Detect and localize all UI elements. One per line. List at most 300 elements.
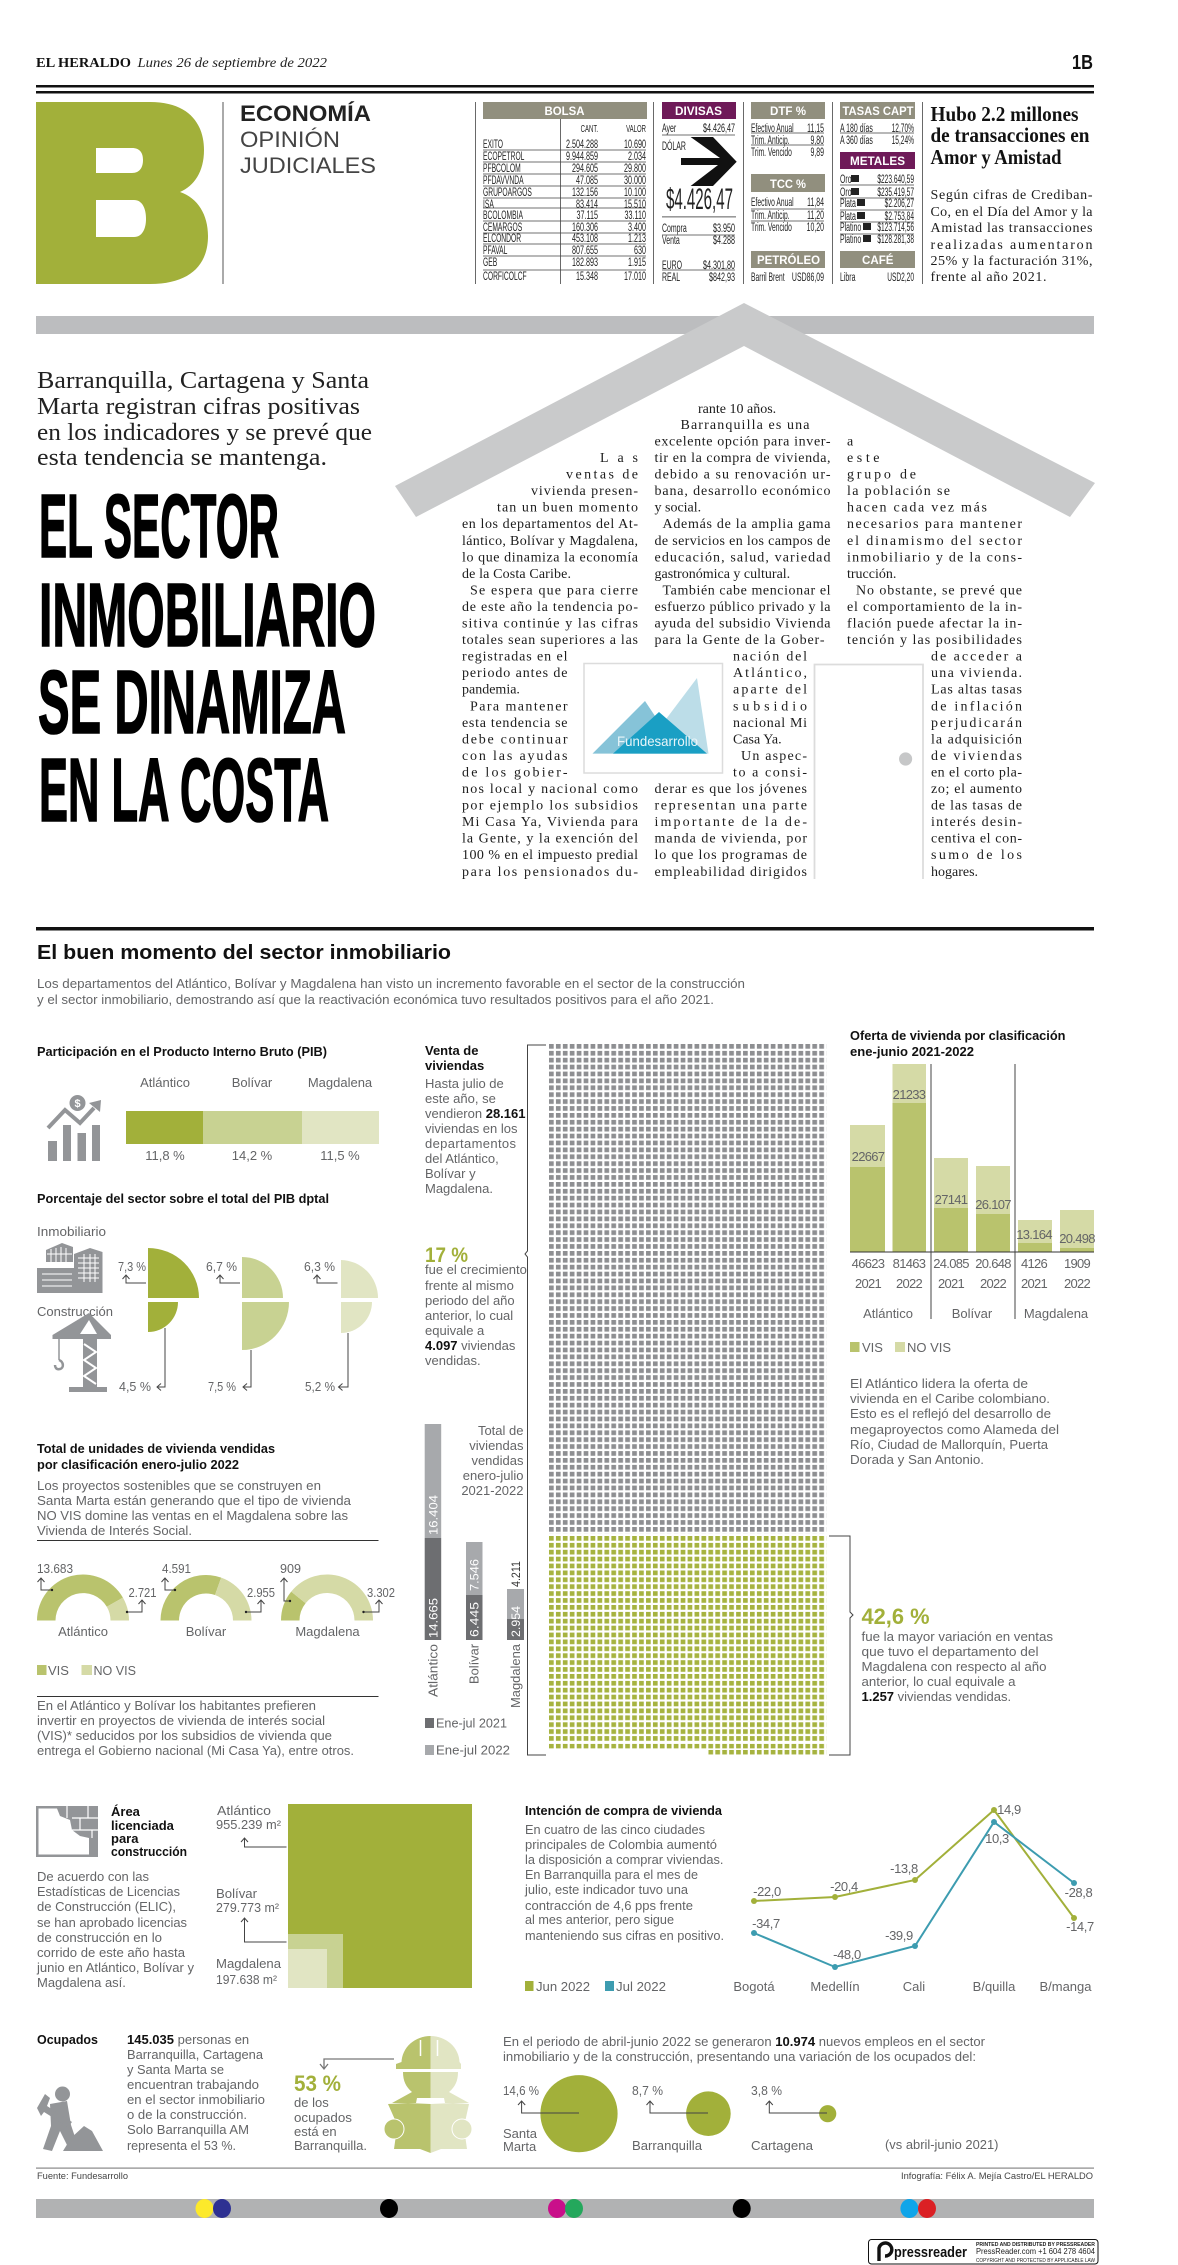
main title xyxy=(38,477,376,841)
panel: ocupados: de los xyxy=(294,2095,329,2110)
panel: total de unidades vendidas: 3.302 xyxy=(367,1585,395,1600)
article column 1: totales sean superiores a las xyxy=(462,633,638,648)
panel: area licenciada: para xyxy=(111,1831,139,1846)
line chart: -20,4 xyxy=(830,1879,858,1894)
table: divisas: $4.426,47 xyxy=(703,122,735,136)
masthead: newspaper and date: 1B xyxy=(1072,52,1093,74)
table: divisas: $4.426,47 xyxy=(666,183,733,216)
callout: 17 %: fue el crecimiento xyxy=(425,1262,527,1277)
pressreader stamp: COPYRIGHT AND PROTECTED BY APPLICABLE LAW xyxy=(976,2258,1095,2264)
table: bolsa: 29.800 xyxy=(624,162,646,176)
panel: total de unidades vendidas: 909 xyxy=(280,1561,301,1576)
article column 2: lo que los programas de xyxy=(654,848,807,863)
table: bolsa: 17.010 xyxy=(624,270,646,284)
icon: tower crane xyxy=(52,1313,111,1392)
section names: ECONOMÍA xyxy=(240,101,371,126)
article column 1: Mi Casa Ya, Vivienda para xyxy=(462,815,639,830)
printer colour bar xyxy=(36,2199,1094,2218)
panel: intencion de compra: En Barranquilla para el mes de xyxy=(525,1867,698,1882)
table: tasas, metales, cafe: METALES xyxy=(850,154,905,168)
panel: total de unidades vendidas: Los proyectos sostenibles que se construyen en xyxy=(37,1478,321,1493)
article column 2: representan una parte xyxy=(654,799,807,814)
panel: area licenciada: de Construcción (ELIC), xyxy=(37,1899,176,1914)
panel: oferta de vivienda: 20.648 xyxy=(975,1256,1011,1271)
panel: intencion de compra: En cuatro de las cinco ciudades xyxy=(525,1822,705,1837)
table: dtf, tcc, petroleo: Barril Brent xyxy=(751,271,785,285)
note: Dorada y San Antonio. xyxy=(850,1452,984,1467)
panel: porcentaje del sector: Inmobiliario xyxy=(37,1224,106,1239)
article column 2: to a consi- xyxy=(733,766,807,780)
panel: ocupados xyxy=(37,2032,472,2153)
panel: nuevos empleos: Santa xyxy=(503,2126,538,2141)
panel: total de unidades vendidas: (VIS)* seducidos por los subsidios de vivienda que xyxy=(37,1728,332,1743)
bracket left of unit grid xyxy=(525,1045,546,1755)
article column 2: Casa Ya. xyxy=(733,732,782,747)
panel: total viviendas vendidas bars xyxy=(425,1423,524,1758)
panel: total de unidades vendidas: Santa Marta están generando que el tipo de vivienda xyxy=(37,1493,352,1508)
table: dtf, tcc, petroleo: 9,89 xyxy=(810,146,824,160)
table: dtf, tcc, petroleo: Efectivo Anual xyxy=(751,122,794,136)
table: bolsa: CEMARGOS xyxy=(483,221,523,235)
panel: oferta de vivienda: 2021 xyxy=(1021,1276,1048,1291)
panel: total de unidades vendidas: 2.955 xyxy=(247,1585,275,1600)
panel: oferta de vivienda: 20.498 xyxy=(1059,1231,1095,1246)
house roof shape xyxy=(395,303,1095,517)
callout: 17 %: vendidas. xyxy=(425,1353,481,1368)
panel: participacion en PIB: Magdalena xyxy=(308,1075,373,1090)
half donut: Bolivar xyxy=(160,1575,252,1620)
bar: Atlantico: Atlántico xyxy=(426,1644,440,1697)
table: divisas xyxy=(662,102,737,285)
panel: participacion en PIB: Bolívar xyxy=(232,1075,273,1090)
article column 1: con las ayudas xyxy=(462,749,568,764)
article column 1: lo que dinamiza la economía xyxy=(462,550,639,565)
bar: Magdalena: Magdalena xyxy=(508,1643,523,1708)
article column 2: esfuerzo público privado y la xyxy=(654,600,831,615)
panel: porcentaje del sector xyxy=(37,1191,378,1394)
main title: EL SECTOR xyxy=(39,477,279,577)
table: dtf, tcc, petroleo: 11,20 xyxy=(807,209,824,223)
icon: buildings xyxy=(37,1243,102,1293)
panel: area licenciada: Atlántico xyxy=(217,1803,271,1818)
article column 1: sitiva continúe y las cifras xyxy=(462,616,638,632)
article column 3: perjudicarán xyxy=(931,716,1022,731)
panel: oferta de vivienda: Atlántico xyxy=(863,1306,913,1321)
table: divisas: $4.288 xyxy=(713,234,735,248)
article column 2: bana, desarrollo económico xyxy=(654,484,830,499)
article column 3: la población se xyxy=(847,484,950,499)
panel: total de unidades vendidas: 2.721 xyxy=(128,1585,156,1600)
article deck: esta tendencia se mantenga. xyxy=(37,445,327,471)
article column 1: vivienda presen- xyxy=(531,484,638,499)
house door xyxy=(814,664,923,879)
panel: intencion de compra xyxy=(524,1802,1094,1994)
panel: porcentaje del sector: 5,2 % xyxy=(305,1379,335,1394)
panel: nuevos empleos: Cartagena xyxy=(751,2138,814,2153)
panel: area licenciada: 279.773 m² xyxy=(216,1900,280,1915)
note: megaproyectos como Alameda del xyxy=(850,1422,1059,1437)
table: bolsa: 182.893 xyxy=(572,256,598,270)
article column 3: trucción. xyxy=(847,567,896,582)
side news item: Amistad las transacciones xyxy=(930,221,1092,236)
panel: porcentaje del sector: 7,3 % xyxy=(118,1259,146,1274)
table: dtf, tcc, petroleo: Efectivo Anual xyxy=(751,196,794,210)
panel: oferta de vivienda: 24.085 xyxy=(933,1256,969,1271)
footer credits: Infografía: Félix A. Mejía Castro/EL HERALDO xyxy=(901,2171,1093,2182)
article column 2: excelente opción para inver- xyxy=(654,434,831,450)
footer credits xyxy=(36,2168,1094,2182)
bar: Magdalena: 2.954 xyxy=(509,1606,523,1637)
table: tasas, metales, cafe: A 180 días xyxy=(840,122,873,136)
table: dtf, tcc, petroleo: Trim. Anticip. xyxy=(751,209,790,223)
panel: oferta de vivienda: Bolívar xyxy=(952,1306,993,1321)
article column 1: para los pensionados du- xyxy=(462,865,638,880)
article column 3 xyxy=(847,434,1023,880)
panel: intencion de compra: al mes anterior, pero sigue xyxy=(525,1912,674,1927)
article column 1: esta tendencia se xyxy=(462,716,568,731)
callout: 42,6 %: Magdalena con respecto al año xyxy=(862,1659,1046,1674)
table: bolsa: 630 xyxy=(634,244,646,258)
panel: oferta de vivienda: 1909 xyxy=(1064,1256,1091,1271)
table: tasas, metales, cafe: Platino xyxy=(840,221,862,235)
table: divisas: Venta xyxy=(662,234,680,248)
side news item: Según cifras de Crediban- xyxy=(930,188,1093,203)
pressreader stamp: pressreader xyxy=(894,2244,967,2261)
panel: nuevos empleos: Barranquilla xyxy=(632,2138,703,2153)
table: bolsa: 453.108 xyxy=(572,232,598,246)
article column 2: derar es que los jóvenes xyxy=(654,782,807,797)
panel: oferta de vivienda: 2021 xyxy=(855,1276,882,1291)
leader arrows xyxy=(122,1275,348,1390)
table: bolsa: CANT. xyxy=(581,124,598,134)
panel: total de unidades vendidas: invertir en proyectos de vivienda de interés social xyxy=(37,1713,325,1728)
callout: 17 %: equivale a xyxy=(425,1323,485,1338)
line chart: -14,7 xyxy=(1066,1919,1094,1934)
bar: Bolivar: 7.546 xyxy=(468,1559,482,1591)
infographic title: El buen momento del sector inmobiliario xyxy=(37,942,451,964)
side news item: Amor y Amistad xyxy=(930,145,1062,169)
panel: total viviendas vendidas bars: viviendas xyxy=(469,1438,524,1453)
bar: Atlantico xyxy=(425,1424,441,1697)
article column 3: de acceder a xyxy=(931,650,1023,665)
text block: venta de viviendas: Hasta julio de xyxy=(425,1076,504,1091)
side news item: Co, en el Día del Amor y la xyxy=(930,205,1093,220)
table: bolsa: ISA xyxy=(483,198,494,212)
note: Esto es el reflejó del desarrollo de xyxy=(850,1406,1051,1421)
line chart: -39,9 xyxy=(885,1928,913,1943)
article column 1: Para mantener xyxy=(470,699,568,714)
panel: nuevos empleos: Marta xyxy=(503,2139,537,2154)
panel: total de unidades vendidas: Atlántico xyxy=(58,1624,108,1639)
legend: VIS / NO VIS xyxy=(37,1663,136,1678)
article column 2: Además de la amplia gama xyxy=(662,517,831,532)
panel: oferta de vivienda: Oferta de vivienda por clasificación xyxy=(850,1028,1066,1043)
panel: participacion en PIB xyxy=(37,1044,379,1163)
article column 2: aparte del xyxy=(733,683,807,698)
table: tasas, metales, cafe: $223.640,59 xyxy=(877,173,914,187)
article column 3: hogares. xyxy=(931,865,978,880)
icon: brick wall xyxy=(36,1806,98,1857)
panel: oferta de vivienda: 4126 xyxy=(1021,1256,1048,1271)
table: bolsa: 807.655 xyxy=(572,244,598,258)
text block: venta de viviendas: vendieron 28.161 xyxy=(425,1106,525,1121)
table: dtf, tcc, petroleo: Trim. Anticip. xyxy=(751,134,790,148)
article column 3: grupo de xyxy=(847,468,916,483)
article column 1: ventas de xyxy=(566,468,638,483)
callout: 42,6 %: anterior, lo cual equivale a xyxy=(862,1674,1016,1689)
line chart xyxy=(733,1802,1094,1994)
note xyxy=(850,1376,1059,1467)
panel: ocupados: está en xyxy=(294,2124,337,2139)
article column 3: el dinamismo del sector xyxy=(847,534,1022,549)
panel: ocupados: representa el 53 %. xyxy=(127,2138,236,2153)
text block: venta de viviendas xyxy=(425,1043,525,1196)
panel: porcentaje del sector: 4,5 % xyxy=(119,1379,151,1394)
article column 3: interés desin- xyxy=(931,815,1022,830)
line chart: Bogotá xyxy=(733,1979,775,1994)
panel: area licenciada: Estadísticas de Licencias xyxy=(37,1884,180,1899)
article column 1: pandemia. xyxy=(462,683,520,698)
article column 2: empleabilidad dirigidos xyxy=(654,865,807,880)
logo window: Fundesarrollo: Fundesarrollo xyxy=(617,733,698,749)
section names xyxy=(222,101,376,284)
side news item: 25% y la facturación 31%, xyxy=(930,254,1092,269)
panel: area licenciada: construcción xyxy=(111,1844,187,1859)
article column 2: gastronómica y cultural. xyxy=(654,567,790,582)
callout: 42,6 %: que tuvo el departamento del xyxy=(862,1644,1039,1659)
article column 1: de este año la tendencia po- xyxy=(462,600,638,615)
table: bolsa xyxy=(483,102,647,284)
article column 2: rante 10 años. xyxy=(698,402,776,417)
table: bolsa: BOLSA xyxy=(544,104,585,118)
nested squares xyxy=(288,1804,472,1988)
bar: Bolivar xyxy=(466,1542,482,1684)
side news item: de transacciones en xyxy=(930,123,1090,147)
article column 3: este xyxy=(847,451,880,466)
article column 3: hacen cada vez más xyxy=(847,501,987,516)
panel: area licenciada: 955.239 m² xyxy=(216,1817,282,1832)
table: dtf, tcc, petroleo: DTF % xyxy=(770,104,806,118)
panel: oferta de vivienda: 22667 xyxy=(852,1149,885,1164)
table: bolsa: 160.306 xyxy=(572,221,598,235)
table: tasas, metales, cafe: A 360 días xyxy=(840,134,873,148)
table: tasas, metales, cafe: Platino xyxy=(840,233,862,247)
table: dtf, tcc, petroleo: 10,20 xyxy=(807,221,824,235)
article column 3: necesarios para mantener xyxy=(847,517,1022,532)
panel: ocupados: ocupados xyxy=(294,2110,353,2125)
callout: 42,6 %: fue la mayor variación en ventas xyxy=(862,1629,1054,1644)
table: bolsa: PFBCOLOM xyxy=(483,162,521,176)
article column 3: de inflación xyxy=(931,699,1022,714)
side news item: realizadas aumentaron xyxy=(930,238,1092,253)
table: tasas, metales, cafe: $128.281,38 xyxy=(877,233,914,247)
table: divisas: $4.301,80 xyxy=(703,259,735,273)
callout: 17 %: 4.097 viviendas xyxy=(425,1338,516,1353)
panel: area licenciada xyxy=(36,1803,472,1990)
table: tasas, metales, cafe: $2.753,84 xyxy=(885,210,914,224)
article column 1 xyxy=(462,451,639,880)
panel: oferta de vivienda: 2021 xyxy=(938,1276,965,1291)
main title: SE DINAMIZA xyxy=(38,653,346,753)
text block: venta de viviendas: viviendas en los xyxy=(425,1121,518,1136)
line chart: 14,9 xyxy=(997,1802,1021,1817)
table: divisas: $3.950 xyxy=(713,222,735,236)
note: vivienda en el Caribe colombiano. xyxy=(850,1391,1050,1406)
legend: periods xyxy=(425,1716,510,1758)
article column 1: 100 % en el impuesto predial xyxy=(462,848,638,863)
table: bolsa: 1.213 xyxy=(628,232,646,246)
table: bolsa: GRUPOARGOS xyxy=(483,186,532,200)
section names: OPINIÓN xyxy=(240,127,340,152)
icon: construction worker half chart xyxy=(384,2036,472,2153)
panel: nuevos empleos: (vs abril-junio 2021) xyxy=(885,2137,998,2152)
line chart: -34,7 xyxy=(752,1916,780,1931)
panel: ocupados: Solo Barranquilla AM xyxy=(127,2122,249,2137)
article column 2 xyxy=(654,402,831,880)
callout: 17 %: 17 % xyxy=(425,1244,468,1267)
panel: area licenciada: Magdalena xyxy=(216,1956,282,1971)
section rule xyxy=(36,927,1094,930)
article column 3: inmobiliario y de la cons- xyxy=(847,550,1022,565)
table: bolsa: EXITO xyxy=(483,138,503,152)
article column 2: nacional Mi xyxy=(733,716,807,731)
panel: total de unidades vendidas: 13.683 xyxy=(37,1561,73,1576)
panel: oferta de vivienda: 26.107 xyxy=(975,1197,1011,1212)
panel: participacion en PIB: 11,5 % xyxy=(320,1148,360,1163)
article column 1: tan un buen momento xyxy=(497,501,638,516)
panel: oferta de vivienda: 21233 xyxy=(893,1087,926,1102)
panel: area licenciada: se han aprobado licencias xyxy=(37,1915,187,1930)
panel: total de unidades vendidas: por clasificación enero-julio 2022 xyxy=(37,1457,239,1472)
article column 1: en los departamentos del At- xyxy=(462,517,638,532)
panel: area licenciada: licenciada xyxy=(111,1818,175,1833)
legend: VIS xyxy=(850,1340,951,1355)
article column 1: periodo antes de xyxy=(462,666,568,681)
table: dtf, tcc, petroleo: 11,84 xyxy=(807,196,824,210)
article column 2: debido a su renovación ur- xyxy=(654,468,831,483)
article column 2: de servicios en los campos de xyxy=(654,534,830,549)
article column 2: Un aspec- xyxy=(741,749,807,764)
panel: nuevos empleos: 3,8 % xyxy=(751,2083,782,2098)
line chart: 10,3 xyxy=(985,1831,1009,1846)
panel: oferta de vivienda: 46623 xyxy=(852,1256,885,1271)
panel: ocupados: y Santa Marta se xyxy=(127,2062,224,2077)
side news item: Hubo 2.2 millones xyxy=(930,102,1078,126)
panel: porcentaje del sector: 6,3 % xyxy=(304,1259,335,1274)
table: bolsa: 15.510 xyxy=(624,198,646,212)
article column 3: No obstante, se prevé que xyxy=(856,583,1022,598)
pressreader stamp: PRINTED AND DISTRIBUTED BY PRESSREADER xyxy=(976,2242,1095,2248)
table: bolsa: 10.690 xyxy=(624,138,646,152)
infographic intro: Los departamentos del Atlántico, Bolívar y Magdalena han visto un incremento favorable en el sector de la construcción xyxy=(37,976,745,991)
article column 3: una vivienda. xyxy=(931,666,1022,681)
half donut: Atlantico xyxy=(37,1574,129,1620)
article column 1: registradas en el xyxy=(462,650,568,665)
text block: venta de viviendas: del Atlántico, xyxy=(425,1151,499,1166)
masthead: newspaper and date: EL HERALDO xyxy=(36,56,131,71)
table: bolsa: ELCONDOR xyxy=(483,232,521,246)
table: dtf, tcc, petroleo: TCC % xyxy=(770,177,806,191)
bracket right of unit grid xyxy=(829,1536,853,1755)
icon: growth chart with coin: $ xyxy=(74,1098,81,1110)
panel: total de unidades vendidas: Total de unidades de vivienda vendidas xyxy=(37,1441,275,1456)
panel: ocupados: en el sector inmobiliario xyxy=(127,2092,265,2107)
table: bolsa: 132.156 xyxy=(572,186,598,200)
article column 1: de la Costa Caribe. xyxy=(462,567,571,582)
panel: total de unidades vendidas: NO VIS domine las ventas en el Magdalena sobre las xyxy=(37,1508,349,1523)
table: divisas: $842,93 xyxy=(709,271,735,285)
icon: worker digging xyxy=(37,2086,103,2151)
article column 2: educación, salud, variedad xyxy=(654,550,830,565)
legend: jun / jul: Jun 2022 xyxy=(536,1979,590,1994)
panel: total de unidades vendidas: 4.591 xyxy=(162,1561,191,1576)
table: dtf, tcc, petroleo: Trim. Vencido xyxy=(751,221,792,235)
note: Río, Ciudad de Mallorquín, Puerta xyxy=(850,1437,1049,1452)
panel: intencion de compra: principales de Colombia aumentó xyxy=(525,1837,717,1852)
bar: Bolivar: 6.445 xyxy=(468,1602,482,1637)
bubbles xyxy=(540,2075,836,2152)
side news item: frente al año 2021. xyxy=(930,270,1046,285)
callout: 17 %: frente al mismo xyxy=(425,1278,514,1293)
icon: growth chart with coin xyxy=(48,1095,101,1161)
panel: participacion en PIB: 14,2 % xyxy=(232,1148,273,1163)
table: bolsa: PFDAVVNDA xyxy=(483,174,524,188)
table: bolsa: GEB xyxy=(483,256,497,270)
callout: 17 %: periodo del año xyxy=(425,1293,515,1308)
table: tasas, metales, cafe: $2.206,27 xyxy=(885,197,914,211)
panel: porcentaje del sector: Construcción xyxy=(37,1304,113,1319)
panel: intencion de compra: manteniendo sus cifras en positivo. xyxy=(525,1928,724,1943)
panel: oferta de vivienda: Magdalena xyxy=(1024,1306,1089,1321)
article column 2: ayuda del subsidio Vivienda xyxy=(654,616,831,632)
grey band xyxy=(36,316,1094,334)
table: tasas, metales, cafe: Oro xyxy=(840,186,852,200)
panel: total de unidades vendidas: Bolívar xyxy=(186,1624,227,1639)
masthead: newspaper and date xyxy=(36,52,1094,94)
panel: oferta de vivienda: 27141 xyxy=(935,1192,968,1207)
article column 3: de viviendas xyxy=(931,749,1022,764)
table: bolsa: 2.034 xyxy=(628,150,646,164)
table: bolsa: BCOLOMBIA xyxy=(483,209,523,223)
table: bolsa: 10.100 xyxy=(624,186,646,200)
panel: area licenciada: Área xyxy=(111,1804,141,1819)
line chart: B/manga xyxy=(1039,1979,1092,1994)
article column 3: flación puede afectar la in- xyxy=(847,616,1022,632)
main title: EN LA COSTA xyxy=(39,741,329,841)
panel: porcentaje del sector: 7,5 % xyxy=(208,1379,236,1394)
table: tasas, metales, cafe: $123.714,56 xyxy=(877,221,914,235)
panel: total de unidades vendidas: entrega el Gobierno nacional (Mi Casa Ya), entre otros. xyxy=(37,1743,354,1758)
callout: 42,6 %: 42,6 % xyxy=(862,1604,930,1629)
article column 3: a xyxy=(847,434,854,450)
panel: ocupados: Barranquilla. xyxy=(294,2138,367,2153)
panel: porcentaje del sector: Porcentaje del sector sobre el total del PIB dptal xyxy=(37,1191,329,1206)
text block: venta de viviendas: Bolívar y xyxy=(425,1166,476,1181)
pressreader stamp xyxy=(868,2240,1098,2264)
article column 3: de las tasas de xyxy=(931,799,1022,814)
panel: ocupados: Ocupados xyxy=(37,2032,98,2047)
table: dtf, tcc, petroleo: 9,80 xyxy=(810,134,824,148)
panel: area licenciada: Magdalena así. xyxy=(37,1975,126,1990)
article column 2: tir en la compra de vivienda, xyxy=(654,451,830,466)
footer credits: Fuente: Fundesarrollo xyxy=(37,2171,128,2182)
table: bolsa: VALOR xyxy=(626,124,646,134)
panel: area licenciada: de construcción en lo xyxy=(37,1930,162,1945)
pressreader stamp: PressReader.com +1 604 278 4604 xyxy=(976,2247,1096,2256)
bar: Atlantico: 16.404 xyxy=(426,1495,440,1535)
article column 2: nación del xyxy=(733,650,807,665)
article column 1: Las xyxy=(600,451,638,466)
